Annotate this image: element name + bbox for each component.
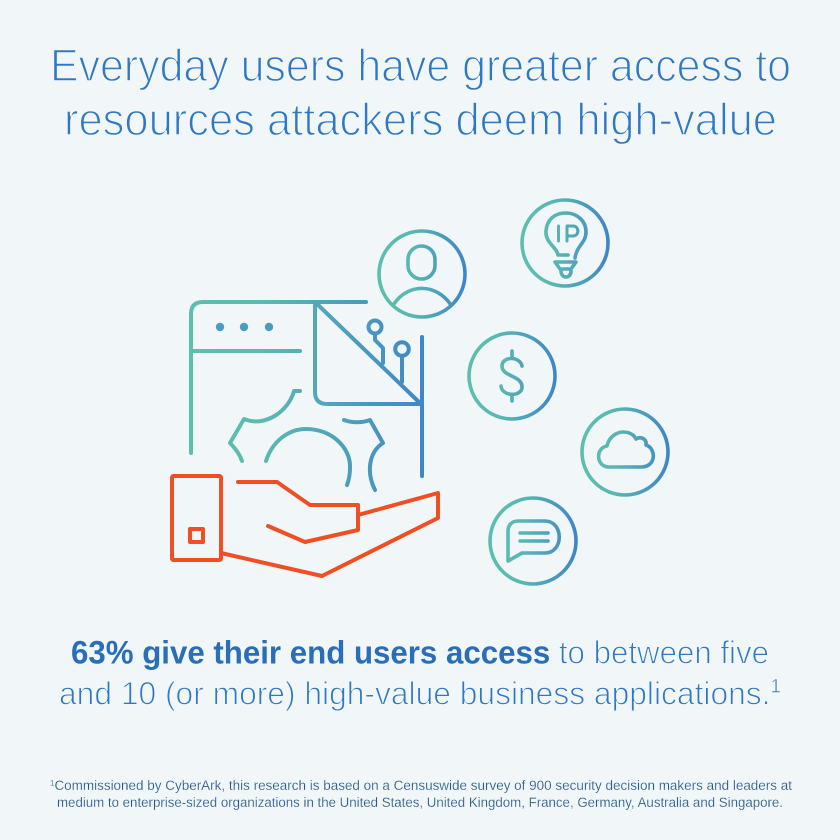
footnote: 1 [50,779,55,788]
window dots [216,323,273,331]
title [50,40,791,145]
circuit nodes [368,320,409,382]
hand [172,476,438,576]
illustration: window, gear and hand [172,302,438,576]
statistic text [59,634,781,712]
statistic text: 63% give their end users access to between five [71,634,769,670]
statistic text: and 10 (or more) high-value business applications. [59,676,776,712]
folded page corner [315,302,422,476]
icon: IP light bulb [522,200,608,286]
title: resources attackers deem high-value [64,94,777,145]
statistic text: 1 [771,676,781,698]
browser window frame [191,302,366,453]
icon: cloud [582,409,668,495]
icon: speech bubble [490,498,576,584]
footnote: Commissioned by CyberArk, this research is based on a Censuswide survey of 900 security decision makers and leaders at [54,778,792,793]
footnote [50,778,792,810]
gear [230,391,383,490]
icon: dollar sign [469,333,555,419]
icon: user circle [379,231,465,317]
title: Everyday users have greater access to [50,40,791,91]
footnote: medium to enterprise-sized organizations in the United States, United Kingdom, France, Germany, Australia and Singapore. [57,795,783,810]
